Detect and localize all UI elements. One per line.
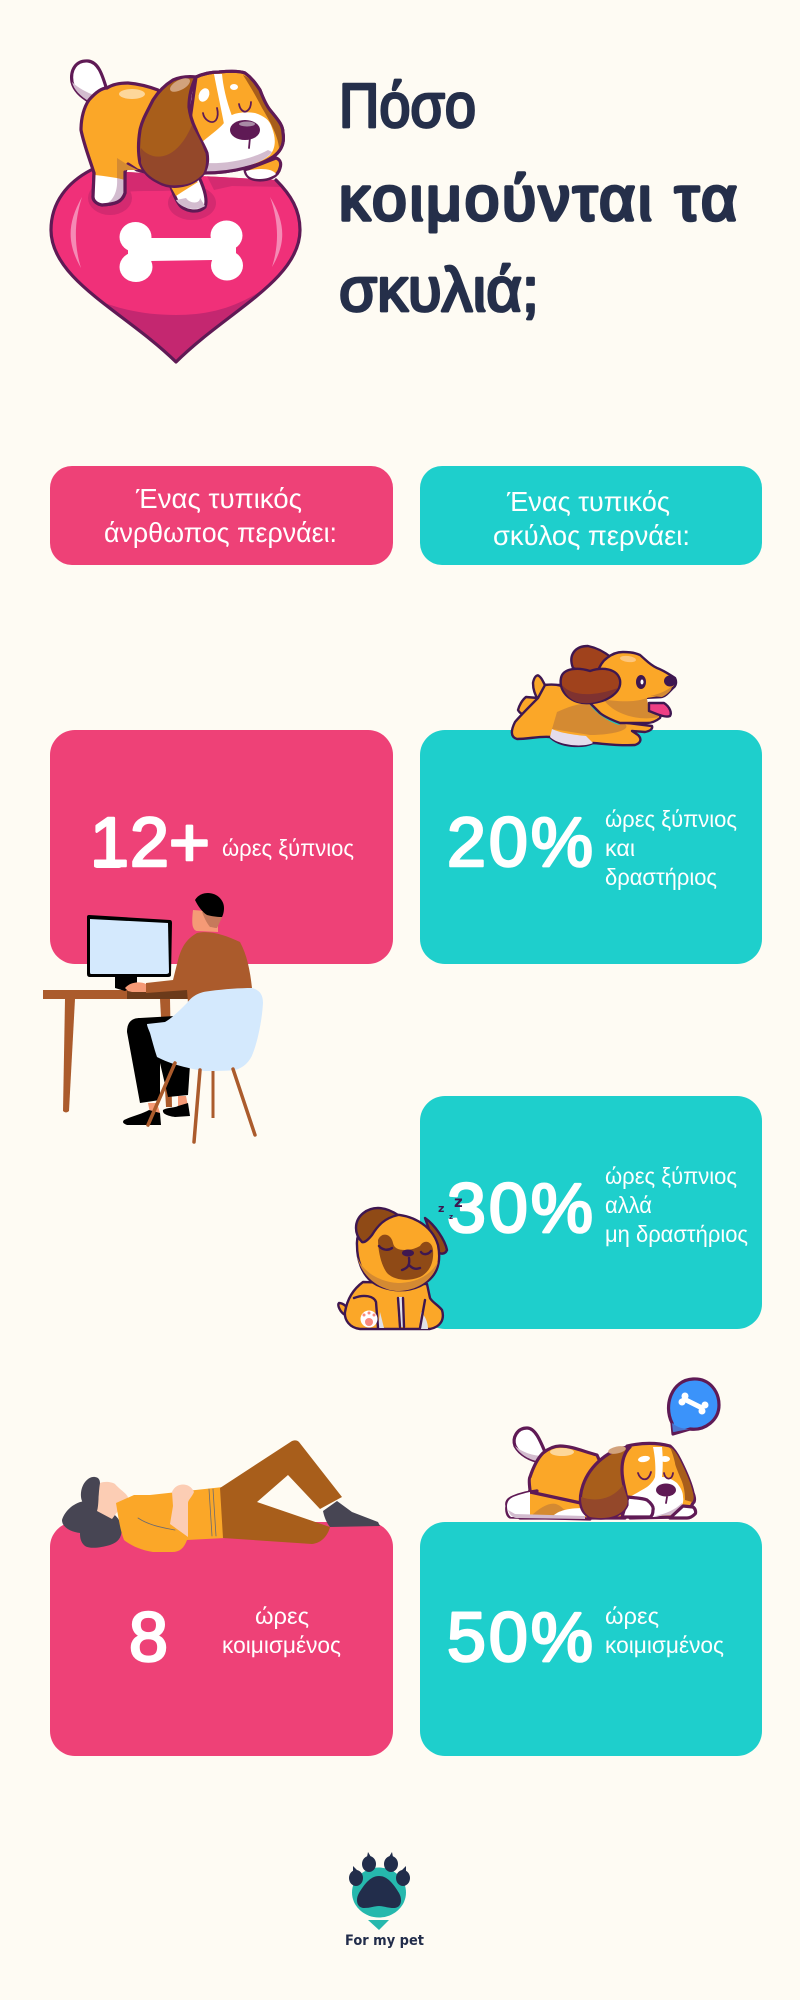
panel: dog awake not active: μη δραστήριος [605,1221,748,1247]
tail and rear leg [518,675,560,715]
paw badge [349,1852,410,1930]
icon: sleepy pug [338,1193,463,1329]
icon: beagle sleeping on heart [50,61,300,370]
left ear [356,1208,398,1242]
panel: human header: άνρθωπος περνάει: [104,517,337,548]
panel: dog awake and active: ώρες ξύπνιος [605,806,737,832]
tail [72,61,106,102]
snore letters: z [449,1213,453,1221]
right ear [425,1218,447,1254]
illustration: man lying down [62,1440,380,1552]
icon: running dog [512,646,676,746]
panel: dog awake not active: αλλά [605,1192,652,1218]
chest shade [552,703,626,735]
belly [550,729,593,745]
panel: dog header [420,466,762,565]
nose [402,1250,414,1256]
chair legs [148,1063,255,1142]
panel: dog sleep hours: ώρες [605,1603,659,1629]
illustration: man at desk [43,893,263,1142]
eyes and mouth [379,1246,431,1270]
muzzle and blaze [628,1447,683,1517]
head [357,1215,439,1290]
body [512,685,652,746]
muzzle [201,112,275,172]
head [190,71,283,173]
shirt [116,1487,225,1552]
collar [592,704,620,723]
eyes [197,84,251,122]
monitor [87,915,172,991]
panel: human sleep hours [50,1522,393,1756]
panel: dog awake and active: και [605,835,635,861]
front ear [561,669,620,703]
back ear [571,646,612,680]
panel: dog awake not active [420,1096,762,1329]
panel: dog sleep hours: κοιμισμένος [605,1632,724,1658]
tail [338,1303,350,1315]
panel: human awake hours: 12+ [90,803,210,881]
face [97,1482,128,1519]
panel: dog awake and active: 20% [447,803,593,881]
blaze [214,74,232,124]
panel: human sleep hours: 8 [129,1598,168,1676]
legs [127,1016,190,1103]
ear [580,1447,630,1518]
torso and arm [146,932,252,1003]
hand [125,982,146,992]
snore letters: z [454,1193,463,1211]
body and hind leg [81,83,175,205]
heart [50,170,300,370]
panel: human sleep hours: κοιμισμένος [222,1632,341,1658]
right ear flap [670,1447,694,1502]
panel: dog awake not active: ώρες ξύπνιος [605,1163,737,1189]
panel: dog header: σκύλος περνάει: [493,520,690,551]
face patches [378,1235,433,1280]
left paw [507,1491,590,1519]
body [520,1446,625,1518]
head [615,1443,694,1518]
table [43,990,188,1112]
ear [138,77,208,186]
head [590,652,676,723]
eyes [638,1455,673,1479]
nose [664,676,676,686]
logo text: For my pet [345,1933,424,1949]
title [339,72,737,325]
panel: human awake hours: ώρες ξύπνιος [222,835,354,861]
nose [230,120,260,140]
logo: For my pet [345,1852,424,1949]
right ear flap [243,75,283,148]
mouth and tongue [647,698,671,717]
icon: sleeping beagle with thought bubble [507,1379,719,1519]
hair [62,1477,122,1548]
belt and folds [138,1489,216,1536]
title: κοιμούνται τα [339,165,737,234]
panel: human header [50,466,393,565]
thought bubble [669,1379,719,1434]
panel: dog awake not active: 30% [447,1169,593,1247]
panel: human header: Ένας τυπικός [135,483,302,514]
eye [636,675,646,689]
chest and paws [354,1296,428,1329]
panel: human awake hours [50,730,393,964]
panel: human sleep hours: ώρες [255,1603,309,1629]
snore letters [438,1193,463,1221]
title: σκυλιά; [339,256,539,325]
bone [120,220,243,282]
shoes [123,1096,190,1125]
panel: dog sleep hours: 50% [447,1598,593,1676]
panel: dog sleep hours [420,1522,762,1756]
title: Πόσο [339,72,476,141]
panel: dog awake and active [420,730,762,964]
chair back leg [212,1070,214,1118]
tail [514,1428,545,1462]
paw [245,158,281,180]
panel: dog header: Ένας τυπικός [506,486,670,517]
paws [622,1497,653,1517]
chair [147,988,263,1071]
head and hair [192,893,224,932]
front leg [171,177,206,211]
snore letters: z [438,1202,444,1215]
shoe [323,1501,380,1527]
trousers [220,1440,342,1544]
nose [656,1484,676,1496]
body [345,1282,443,1329]
panel: dog awake and active: δραστήριος [605,864,717,890]
arm [170,1484,194,1537]
